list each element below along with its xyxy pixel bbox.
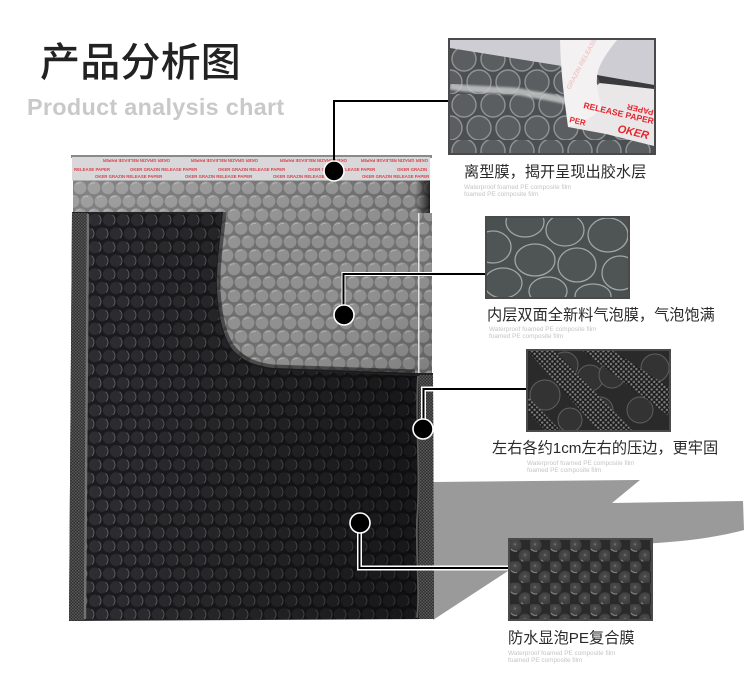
detail photo: release film: RELEASE PAPER [583, 100, 656, 126]
caption 4 heading: 防水显泡PE复合膜 [508, 630, 635, 647]
release paper strip: RELEASE PAPER [74, 167, 111, 172]
caption 1 [464, 164, 646, 198]
callout line 3 [413, 389, 526, 439]
release paper strip: OKER GRAZIN RELEASE PAPER [102, 158, 170, 163]
release paper strip: OKER GRAZIN RELEASE PAPER [190, 158, 258, 163]
callout line 1 [324, 101, 448, 181]
envelope [69, 155, 434, 621]
release paper strip: OKER GRAZIN RELEASE PAPER [360, 158, 428, 163]
detail photo: release film: PER [569, 115, 587, 128]
caption 3 English text [527, 460, 634, 474]
subtitle: Product analysis chart [27, 94, 284, 120]
release paper strip: OKER GRAZIN RELEASE PAPER [185, 174, 253, 179]
envelope inner bubble film [73, 180, 432, 374]
caption 3 English text: foamed PE composite film [527, 467, 601, 474]
detail photo: PE composite film [508, 538, 653, 621]
release paper strip: OKER GRAZIN RELEASE PAPER [218, 167, 286, 172]
caption 4 English text: Waterproof foamed PE composite film [508, 650, 615, 657]
caption 1 heading: 离型膜，揭开呈现出胶水层 [464, 164, 646, 181]
caption 4 English text: foamed PE composite film [508, 657, 582, 664]
caption 3 heading: 左右各约1cm左右的压边，更牢固 [492, 440, 718, 457]
caption 1 English text [464, 184, 571, 198]
caption 3 English text: Waterproof foamed PE composite film [527, 460, 634, 467]
caption 4 [508, 630, 635, 664]
release paper strip: OKER GRAZIN RELEASE PAPER [95, 174, 163, 179]
release paper strip: OKER GRAZIN RELEASE PAPER [362, 174, 430, 179]
caption 2 [487, 306, 715, 340]
detail photo: release film: GRAZIN RELEASE [566, 36, 599, 91]
detail photo: release film: OKER [616, 123, 650, 142]
caption 4 English text [508, 650, 615, 664]
detail photo: bubble film [485, 216, 630, 299]
release paper strip: OKER GRAZIN RELEASE PAPER [308, 167, 376, 172]
callout line 2 [334, 274, 485, 325]
release paper strip: OKER GRAZIN RELEASE PAPER [273, 174, 341, 179]
cast shadow [433, 480, 744, 620]
detail photo: release film [448, 36, 656, 155]
caption 1 English text: Waterproof foamed PE composite film [464, 184, 571, 191]
detail photo: release film: PAPER [626, 102, 654, 117]
caption 2 English text: foamed PE composite film [489, 333, 563, 340]
release paper strip: OKER GRAZIN [397, 167, 427, 172]
caption 1 English text: foamed PE composite film [464, 191, 538, 198]
detail photo: pressed edge [526, 349, 671, 432]
release paper strip [71, 155, 432, 180]
release paper strip: OKER GRAZIN RELEASE PAPER [130, 167, 198, 172]
callout line 4 [350, 513, 508, 568]
release paper strip: OKER GRAZIN RELEASE PAPER [279, 158, 347, 163]
black outer film [69, 212, 434, 621]
title: 产品分析图 [40, 41, 241, 85]
caption 2 heading: 内层双面全新料气泡膜，气泡饱满 [487, 307, 715, 324]
caption 3 [492, 440, 718, 474]
caption 2 English text: Waterproof foamed PE composite film [489, 326, 596, 333]
caption 2 English text [489, 326, 596, 340]
